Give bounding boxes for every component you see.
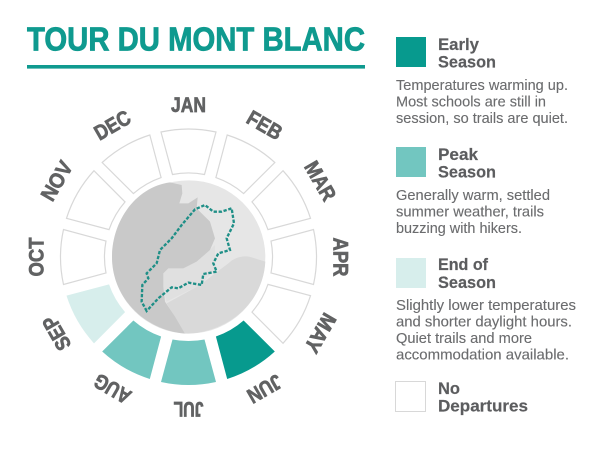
swatch: peak season xyxy=(396,147,426,177)
description line 2: summer weather, trails xyxy=(396,204,544,220)
month segment: JAN xyxy=(161,129,216,174)
route map circle xyxy=(112,180,265,334)
description line 4: accommodation available. xyxy=(396,348,569,364)
legend: end of season xyxy=(396,256,576,364)
seasonal month wheel xyxy=(26,94,352,420)
month label: FEB: FEB xyxy=(242,107,286,145)
central terrain xyxy=(163,245,215,302)
heading: early season: Early xyxy=(438,36,480,54)
dark mountain terrain xyxy=(112,182,215,334)
month segment: DEC xyxy=(101,132,171,199)
month label: DEC: DEC xyxy=(91,106,135,145)
description: peak season: Generally warm, settled xyxy=(396,188,550,204)
month label: JUL: JUL xyxy=(173,397,204,420)
month label: OCT: OCT xyxy=(26,237,48,276)
heading line: season: Season xyxy=(438,164,496,182)
month label: MAY: MAY xyxy=(299,309,340,357)
description line 2: and shorter daylight hours. xyxy=(396,314,572,330)
lower right terrain xyxy=(167,256,265,334)
month segment: APR xyxy=(271,230,316,284)
heading line: departures: Departures xyxy=(438,398,528,416)
month label: AUG: AUG xyxy=(90,368,135,408)
legend: no departures xyxy=(396,380,528,416)
month label: JUN: JUN xyxy=(243,369,286,407)
month label: NOV: NOV xyxy=(37,157,78,205)
legend: early season xyxy=(396,36,568,127)
description: early season: Temperatures warming up. xyxy=(396,78,568,94)
swatch: end of season xyxy=(396,258,426,288)
month segment: JUN early season xyxy=(206,315,276,382)
heading: end of season: End of xyxy=(438,256,488,274)
month label: MAR: MAR xyxy=(299,157,340,205)
swatch: no departures xyxy=(396,382,426,412)
month segment: SEP end of season xyxy=(64,274,131,345)
month segment: MAY xyxy=(246,274,313,345)
description line 2: Most schools are still in xyxy=(396,94,546,110)
month segment: JUL peak season xyxy=(161,340,216,385)
month segment: MAR xyxy=(246,169,313,240)
month label: SEP: SEP xyxy=(38,311,76,354)
heading: no departures: No xyxy=(438,380,460,398)
description: end of season: Slightly lower temperatures xyxy=(396,298,576,314)
description line 3: buzzing with hikers. xyxy=(396,221,522,237)
dotted trail route xyxy=(142,205,234,311)
month segment: NOV xyxy=(64,169,131,240)
month segment: AUG peak season xyxy=(101,315,171,382)
month label: JAN: JAN xyxy=(171,94,206,117)
legend: peak season xyxy=(396,146,550,237)
title: TOUR DU MONT BLANC xyxy=(27,20,365,58)
month label: APR: APR xyxy=(328,238,352,276)
map base xyxy=(112,180,265,334)
heading line: season: Season xyxy=(438,274,496,292)
swatch: early season xyxy=(396,37,426,67)
month segment: FEB xyxy=(206,132,276,199)
heading: peak season: Peak xyxy=(438,146,479,164)
heading line: season: Season xyxy=(438,54,496,72)
month segment: OCT xyxy=(61,230,106,284)
description line 3: Quiet trails and more xyxy=(396,331,532,347)
description line 3: session, so trails are quiet. xyxy=(396,111,568,127)
